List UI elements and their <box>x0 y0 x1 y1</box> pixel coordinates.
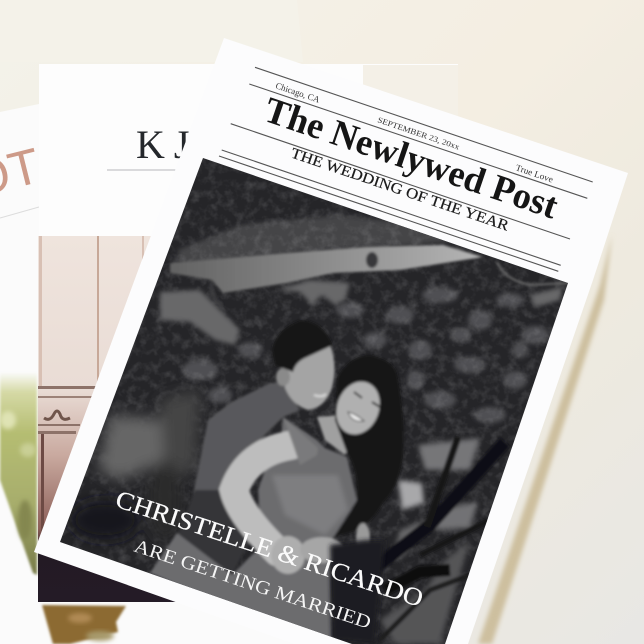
photo: couple embracing under tree <box>50 150 580 644</box>
photo: pink room with dresser <box>38 236 198 602</box>
magazine: middle, KJ cover <box>38 64 458 602</box>
man hair <box>272 320 333 372</box>
shadow of main card <box>478 235 612 644</box>
tree branch <box>170 245 568 305</box>
background bokeh <box>182 287 549 423</box>
photo: brown autumn foliage <box>42 605 126 644</box>
woman eyes and smile <box>348 392 380 421</box>
man shirt <box>192 382 300 494</box>
bottom white sheet <box>0 596 360 644</box>
date text: SEPTEMBER 23, 20xx <box>376 115 461 152</box>
masthead <box>219 67 593 271</box>
magazine: left, pink OT cover <box>0 104 46 600</box>
icon: dresser ornament <box>44 411 70 419</box>
man smile <box>314 394 326 396</box>
back cream sheet <box>0 0 303 62</box>
photo: green foliage <box>0 372 37 575</box>
woman dress <box>150 417 357 640</box>
dress ruffle <box>285 420 318 464</box>
woman hair <box>333 355 404 537</box>
woman neck <box>317 415 350 455</box>
lower-right light patches and branches <box>375 437 505 644</box>
man sleeve dark lower <box>178 490 250 575</box>
cream right part of sheet <box>363 65 458 125</box>
woman arm <box>234 445 292 552</box>
subtitle: the wedding of the year: THE WEDDING OF THE YEAR <box>289 146 511 235</box>
left lower blurred background <box>70 390 200 540</box>
title: The Newlywed Post: The Newlywed Post <box>259 90 564 228</box>
location text: Chicago, CA <box>274 80 322 105</box>
shadow right of skirt <box>330 540 385 644</box>
texture mottling <box>50 150 580 644</box>
foliage above branch <box>177 214 452 262</box>
caption: are getting married: ARE GETTING MARRIED <box>131 536 373 634</box>
man face <box>283 345 335 410</box>
tagline text: True Love <box>514 162 554 184</box>
clasped hands <box>271 523 370 574</box>
dress highlight <box>272 475 348 535</box>
couple figures <box>150 320 404 640</box>
leaves below branch <box>160 280 562 345</box>
woman face <box>334 379 382 437</box>
heading: K J: KJ <box>136 122 198 167</box>
names: christelle and ricardo: CHRISTELLE & RICARDO <box>112 486 426 613</box>
